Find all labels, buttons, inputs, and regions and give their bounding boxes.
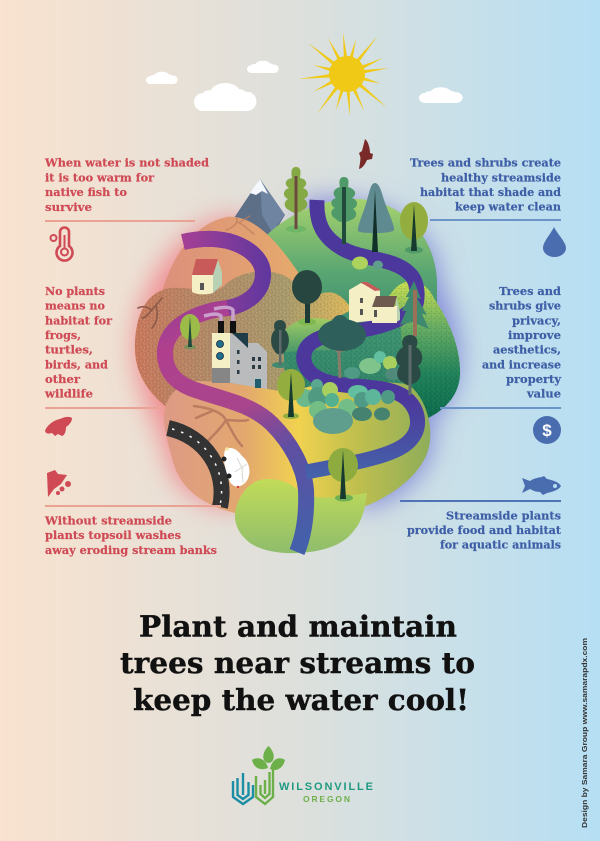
text: water not shaded <box>44 157 209 214</box>
text: water not shaded: When water is not shaded <box>44 157 209 170</box>
sun <box>298 32 389 116</box>
text: healthy habitat <box>410 157 561 214</box>
text: privacy: improve <box>508 329 561 342</box>
logo: Wilsonville Oregon <box>233 746 373 804</box>
icon: W marks <box>233 765 273 804</box>
text: no plants: turtles, <box>45 344 93 357</box>
text: topsoil: Without streamside <box>44 514 172 527</box>
text: privacy: and increase <box>482 358 561 371</box>
text: topsoil: plants topsoil washes <box>45 529 181 542</box>
title: Plant and maintain <box>139 610 457 644</box>
hill: forest floor <box>283 318 405 405</box>
tree: small dark <box>271 320 289 368</box>
stream: left branch <box>165 239 306 552</box>
car <box>222 447 249 488</box>
hill: lower right green <box>370 281 460 418</box>
text: water not shaded: survive <box>45 201 92 214</box>
text: privacy <box>482 285 562 401</box>
tree: olive round top right <box>400 202 428 254</box>
house: left <box>192 259 222 294</box>
title: keep the water cool! <box>133 683 469 717</box>
hill: peach upper left <box>158 217 312 325</box>
divider <box>45 220 195 222</box>
hill: upper green <box>262 199 437 345</box>
text: water not shaded: native fish to <box>45 186 127 199</box>
glow: red left side <box>135 217 300 510</box>
tree: fir right <box>400 281 429 336</box>
text: privacy: shrubs give <box>489 300 561 313</box>
text: privacy: value <box>526 388 561 401</box>
logo sub text: OREGON <box>303 794 350 804</box>
tree: small olive left <box>180 314 200 350</box>
tree: green lobed <box>331 177 357 244</box>
divider <box>45 505 221 507</box>
road <box>168 428 222 507</box>
hill: peach to olive base <box>164 378 430 513</box>
soil cracks <box>138 216 254 446</box>
text: no plants: No plants <box>45 285 105 298</box>
icon: dollar: $ <box>542 421 552 440</box>
text: no plants: frogs, <box>45 329 81 342</box>
tree: slate conifer <box>358 183 394 252</box>
text: healthy habitat: Trees and shrubs create <box>410 157 561 170</box>
text: no plants: other <box>45 373 80 386</box>
text: healthy habitat: keep water clean <box>455 201 561 214</box>
mound: light green foreground <box>235 479 367 553</box>
trees <box>180 167 429 502</box>
tree: dark lobed right <box>396 335 422 395</box>
text: privacy: privacy, <box>512 314 561 327</box>
text: food and habitat <box>407 509 562 552</box>
clouds <box>146 61 463 111</box>
text: topsoil: away eroding stream banks <box>45 544 217 557</box>
tree: broad teal <box>318 315 366 378</box>
credit: Design by Samara Group www.samarapdx.com <box>582 638 589 828</box>
tree: olive on mound <box>328 448 358 502</box>
divider <box>430 219 561 221</box>
icon: leaves <box>252 746 285 770</box>
text: no plants: wildlife <box>44 388 93 401</box>
text: privacy: aesthetics, <box>493 344 561 357</box>
text: food and habitat: provide food and habitat <box>407 524 562 537</box>
landscape illustration <box>135 167 460 553</box>
text: healthy habitat: habitat that shade and <box>420 186 561 199</box>
hill: small green hump <box>283 318 339 352</box>
title: trees near streams to <box>120 646 475 680</box>
glow: blue right side <box>300 199 460 510</box>
icon: fish <box>522 476 561 495</box>
factory <box>204 307 267 389</box>
tree: olive lower centre <box>277 369 305 419</box>
divider <box>440 407 561 409</box>
bushes <box>296 256 401 434</box>
icon: dollar <box>533 416 561 444</box>
house: right <box>349 282 400 323</box>
hill: speckled soil <box>135 271 352 410</box>
panel: left warnings <box>44 157 221 557</box>
mountain <box>234 179 285 240</box>
tree: dark round <box>292 270 322 326</box>
text: privacy: property <box>506 373 562 386</box>
icon: eroding soil <box>47 470 71 497</box>
text: no plants: means no <box>45 300 105 313</box>
text: no plants: habitat for <box>45 314 112 327</box>
divider <box>45 407 165 409</box>
text: privacy: Trees and <box>499 285 561 298</box>
icon: thermometer <box>50 228 72 261</box>
text: topsoil <box>44 514 217 557</box>
icon: frog <box>45 417 72 436</box>
tree: olive lobed <box>284 167 308 232</box>
text: water not shaded: it is too warm for <box>45 171 154 184</box>
title <box>120 610 475 717</box>
text: food and habitat: Streamside plants <box>446 509 561 522</box>
icon: bird <box>359 139 373 169</box>
icon: water drop <box>543 227 566 257</box>
logo text: WILSONVILLE <box>279 781 373 793</box>
divider <box>400 500 561 502</box>
text: no plants <box>44 285 112 401</box>
panel: right benefits <box>400 157 566 552</box>
text: healthy habitat: healthy streamside <box>441 171 561 184</box>
stream: right branch <box>304 200 418 472</box>
text: food and habitat: for aquatic animals <box>440 539 561 552</box>
text: no plants: birds, and <box>45 358 108 371</box>
